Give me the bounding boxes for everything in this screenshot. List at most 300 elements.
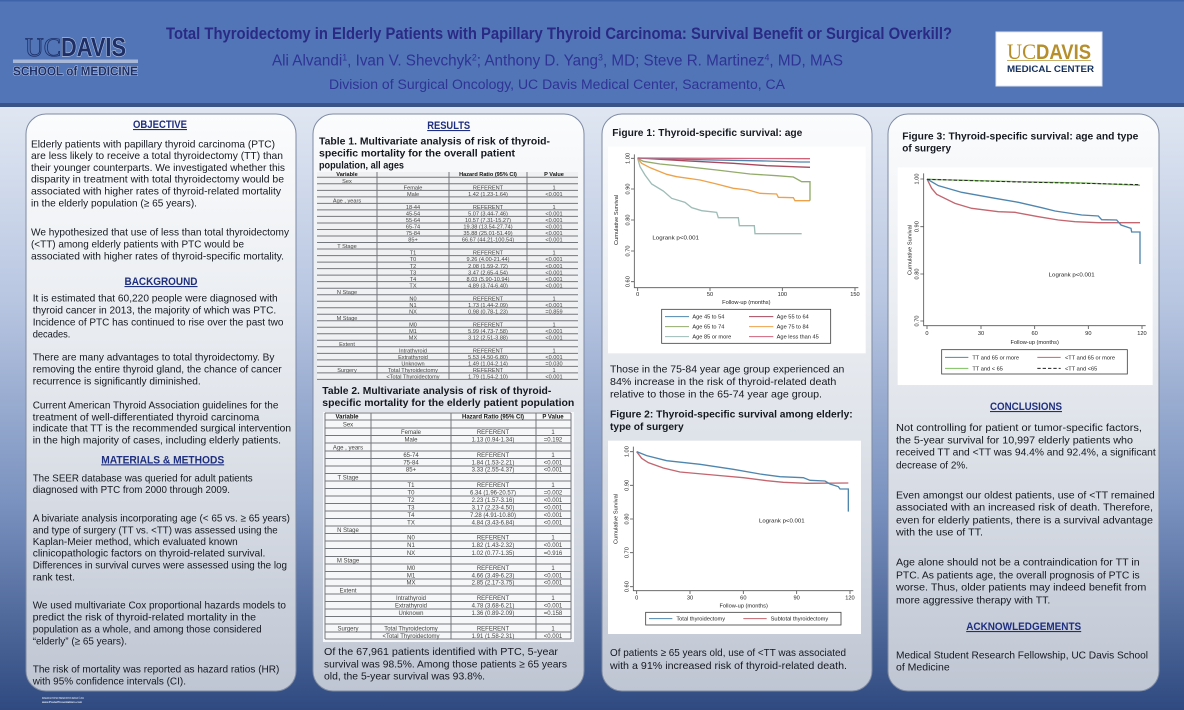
text: materials and methods: “elderly” (≥ 65 years). (33, 636, 127, 647)
table 1: Extent (339, 342, 355, 348)
panel: objective, background, methods (26, 114, 296, 691)
table 1: 4.89 (3.74-6.40) (468, 283, 508, 289)
authors: 4 (765, 52, 769, 62)
table 2: TX (407, 520, 415, 526)
table 1: 5.07 (3.44-7.46) (468, 212, 508, 218)
table 1: N1 (409, 303, 417, 309)
heading: acknowledgements: ACKNOWLEDGEMENTS (966, 621, 1081, 633)
authors: , MD; Steve R. Martinez (603, 52, 765, 70)
text: materials and methods: Kaplan-Meier method, which evaluated known (33, 537, 238, 548)
text: figure 2 finding (609, 648, 847, 672)
axis labels: 0.60 (625, 276, 631, 287)
table 2: T4 (407, 513, 415, 519)
text: background: Incidence of PTC has continued to rise over the past two (33, 317, 284, 328)
figure 2 heading: type of surgery (610, 422, 684, 433)
axis labels: 0.60 (624, 581, 630, 592)
legend (942, 350, 1127, 374)
table 2 caption: Table 2. Multivariate analysis of risk of thyroid- (322, 386, 552, 397)
table 2: M0 (407, 566, 416, 572)
table 1: <0.001 (545, 225, 563, 231)
table 1: 8.03 (5.90-10.94) (467, 277, 510, 283)
axis labels: 0.70 (915, 315, 921, 327)
table 2: M1 (407, 574, 416, 580)
table 1: 1 (552, 186, 556, 192)
text: conclusions (895, 423, 1156, 606)
table 2: N0 (407, 536, 415, 542)
axis labels: Cumulative Survival (613, 494, 619, 544)
table 2: MX (406, 580, 416, 586)
table 2: Extent (339, 588, 357, 594)
curve: TT and under 65 (927, 179, 1140, 185)
table 2: T0 (407, 490, 415, 496)
table 2: 1 (551, 626, 555, 632)
axis labels: 0 (925, 331, 929, 337)
table 1: 1.49 (1.04-2.14) (468, 362, 508, 368)
table 2: REFERENT (477, 453, 509, 459)
header banner (0, 0, 1184, 107)
curve: less than TT and under 65 (927, 179, 1140, 185)
text: background: recurrence is significantly diminished. (33, 377, 201, 388)
logo: UC Davis Medical Center: DAVIS (1036, 41, 1091, 64)
axis labels (614, 153, 860, 306)
table 1 (317, 172, 578, 381)
text: materials and methods: predict the risk of thyroid-related mortality in the (33, 612, 256, 623)
text: acknowledgements: of Medicine (896, 663, 950, 674)
authors: ; Anthony D. Yang (477, 52, 598, 70)
table 2: 2.23 (1.57-3.16) (472, 498, 514, 504)
table 1: 85+ (408, 238, 418, 244)
text: materials and methods: rank test. (33, 573, 75, 584)
table 1: <0.001 (545, 283, 563, 289)
table 2: 1.02 (0.77-1.35) (472, 551, 514, 557)
table 1: M Stage (337, 316, 357, 322)
text: materials and methods: diagnosed with PTC from 2000 through 2009. (33, 485, 230, 496)
legend: Age 85 or more (692, 335, 731, 341)
table 1: Male (407, 192, 419, 198)
table 1: <0.001 (545, 238, 563, 244)
axis labels: Logrank p<0.001 (1049, 273, 1095, 279)
table 2: N1 (407, 543, 415, 549)
axis labels: 0.90 (625, 183, 631, 195)
figure 3 heading: of surgery (902, 144, 951, 155)
text: background: treatment of well-differentiated thyroid carcinoma (33, 412, 260, 423)
table 2: 75-84 (403, 460, 419, 466)
axis labels: 1.00 (625, 153, 631, 164)
chart: figure 1 survival by age (608, 147, 866, 353)
table 1: <0.001 (545, 212, 563, 218)
table 2: T1 (407, 483, 415, 489)
text: conclusions: decrease of 2%. (896, 460, 968, 471)
table 2: M Stage (337, 558, 360, 564)
axis labels: 100 (778, 292, 787, 298)
text: objective: Elderly patients with papillary thyroid carcinoma (PTC) (31, 140, 275, 151)
axis labels: Follow-up (months) (1010, 340, 1059, 346)
table 2: Variable (335, 414, 359, 420)
text: conclusions: Age alone should not be a contraindication for TT in (896, 558, 1140, 569)
curve: age 55 to 64 (638, 158, 810, 167)
table 2: REFERENT (477, 626, 509, 632)
figure 1 heading: Figure 1: Thyroid-specific survival: age (612, 128, 803, 139)
heading: results: RESULTS (427, 120, 470, 132)
table 2: 1 (551, 536, 555, 542)
curve: age 45 to 54 (638, 158, 810, 162)
text: figure 2 finding: Of patients ≥ 65 years old, use of <TT was associated (610, 648, 846, 659)
table 2: =0.002 (544, 490, 563, 496)
table 1: 75-84 (406, 231, 420, 237)
text: background: There are many advantages to total thyroidectomy. By (33, 353, 275, 364)
table 2 caption (322, 386, 574, 409)
axis labels: 30 (978, 331, 984, 337)
table 2: T2 (407, 498, 415, 504)
heading: conclusions: CONCLUSIONS (990, 401, 1062, 413)
table 1: 10.57 (7.31-15.27) (465, 218, 511, 224)
text: figure 1 finding: 84% increase in the risk of thyroid-related death (610, 377, 837, 388)
text: materials and methods: A bivariate analysis incorporating age (< 65 vs. ≥ 65 years) (33, 514, 290, 525)
axis labels: 30 (687, 596, 693, 602)
axis labels: 0.80 (624, 513, 630, 525)
table 2: 1.91 (1.58-2.31) (472, 634, 514, 640)
table 1: 5.53 (4.50-6.80) (468, 355, 508, 361)
table 2: <Total Thyroidectomy (382, 634, 440, 640)
table 1: <0.001 (545, 231, 563, 237)
text: acknowledgements: Medical Student Research Fellowship, UC Davis School (896, 650, 1148, 661)
table 2: <0.001 (544, 543, 563, 549)
table 1: Age , years (333, 199, 361, 205)
table 1: TX (409, 283, 417, 289)
legend: Total thyroidectomy (676, 617, 725, 623)
heading: materials and methods: MATERIALS & METHODS (101, 454, 224, 466)
table 2: <0.001 (544, 520, 563, 526)
table 2: T3 (407, 506, 415, 512)
table 1: T0 (410, 257, 416, 263)
table 2: Age , years (333, 446, 363, 452)
table 1: 35.88 (25.01-51.49) (463, 231, 513, 237)
logo: UC Davis School of Medicine: DAVIS (61, 32, 126, 62)
text: figure 1 finding: Those in the 75-84 year age group experienced an (610, 365, 845, 376)
table 2: <0.001 (544, 574, 563, 580)
legend: Subtotal thyroidectomy (771, 617, 828, 623)
table 2: REFERENT (477, 536, 509, 542)
table 2: P Value (542, 414, 564, 420)
axis labels: 0.70 (625, 245, 631, 257)
axis labels (613, 446, 855, 609)
table 2: Intrathyroid (396, 596, 426, 602)
axis labels: 0.90 (915, 221, 921, 232)
text: background: Current American Thyroid Association guidelines for the (33, 400, 279, 411)
text: results summary (324, 647, 567, 682)
table 2: 3.17 (2.23-4.50) (472, 506, 514, 512)
table 1: N Stage (337, 290, 357, 296)
axis labels: Logrank p<0.001 (652, 235, 699, 241)
table 1: 66.67 (44.21-100.54) (462, 238, 514, 244)
text: figure 1 finding (610, 365, 845, 400)
text: background: removing the entire thyroid gland, the chance of cancer (33, 365, 282, 376)
axis labels: 1.00 (915, 173, 921, 185)
heading: background: BACKGROUND (124, 276, 198, 288)
legend (662, 309, 831, 343)
table 2: 3.33 (2.55-4.37) (472, 468, 514, 474)
curve: age less than 45 (638, 156, 810, 161)
figure 2 heading (610, 410, 853, 433)
table 2: 1.82 (1.43-2.32) (472, 543, 514, 549)
table 1: 1.42 (1.23-1.64) (468, 192, 508, 198)
table 2: 2.85 (2.17-3.75) (472, 580, 514, 586)
footer credit: RESEARCH POSTER PRESENTATION DESIGN © 2012 (42, 696, 84, 700)
text: materials and methods: clinicopathologic factors on thyroid-related survival. (33, 549, 265, 560)
table 1: Total Thyroidectomy (388, 368, 438, 374)
table 1: 0.98 (0.78-1.23) (468, 309, 508, 315)
text: conclusions: even for elderly patients, there is a survival advantage (896, 515, 1153, 526)
table 2: NX (407, 551, 415, 557)
table 1: 65-74 (406, 225, 420, 231)
table 1: REFERENT (473, 296, 504, 302)
table 1: <0.001 (545, 375, 563, 381)
text: conclusions: received TT and <TT was 94.4% and 92.4%, a significant (896, 448, 1156, 459)
axis labels: 50 (707, 292, 713, 298)
table 1: 5.99 (4.73-7.58) (468, 329, 508, 335)
table 1 caption: specific mortality for the overall patient (319, 148, 516, 159)
legend: <TT and <65 (1065, 366, 1097, 372)
table 1: <Total Thyroidectomy (386, 375, 440, 381)
logo: UC Davis School of Medicine: SCHOOL of MEDICINE (13, 64, 138, 78)
table 1: M1 (409, 329, 417, 335)
text: conclusions: Even amongst our oldest patients, use of <TT remained (896, 490, 1155, 501)
table 1: 1 (552, 348, 556, 354)
curve: subtotal thyroidectomy (637, 452, 848, 483)
table 2: 65-74 (403, 453, 419, 459)
table 2: 1 (551, 453, 555, 459)
table 2: <0.001 (544, 498, 563, 504)
text: materials and methods (32, 473, 290, 687)
axis labels: 90 (794, 596, 800, 602)
text: objective: (<TT) among elderly patients with PTC would be (31, 239, 244, 250)
axis labels: Follow-up (months) (719, 603, 768, 609)
text: acknowledgements (896, 650, 1148, 674)
curve: total thyroidectomy (637, 452, 848, 512)
table 1: T4 (410, 277, 416, 283)
text: materials and methods: The risk of mortality was reported as hazard ratios (HR) (33, 665, 279, 676)
table 1: <0.001 (545, 303, 563, 309)
table 1: =0.859 (545, 309, 563, 315)
text: materials and methods: and type of surgery (TT vs. <TT) was assessed using the (33, 525, 278, 536)
table 1: 45-54 (406, 212, 420, 218)
legend (646, 612, 841, 625)
text: materials and methods: The SEER database was queried for adult patients (33, 473, 253, 484)
legend: Age 45 to 54 (692, 315, 724, 321)
table 1: Variable (336, 172, 358, 178)
table 2: Hazard Ratio (95% CI) (462, 414, 524, 420)
table 1: M0 (409, 322, 417, 328)
table 1: Female (404, 186, 422, 192)
legend: Age 75 to 84 (777, 325, 809, 331)
text: results summary: survival was 98.5%. Among those patients ≥ 65 years (324, 659, 567, 670)
table 1: REFERENT (473, 322, 504, 328)
table 1: <0.001 (545, 270, 563, 276)
table 2: T Stage (338, 476, 359, 482)
legend: Age 65 to 74 (692, 325, 724, 331)
axis labels: 0 (636, 292, 639, 298)
table 1: =0.030 (545, 362, 563, 368)
table 1: N0 (409, 296, 417, 302)
axis labels: Cumulative Survival (614, 195, 620, 245)
axis labels: 90 (1085, 331, 1091, 337)
table 1: 9.26 (4.00-21.44) (467, 257, 510, 263)
table 2: 4.66 (3.49-6.23) (472, 574, 514, 580)
legend: TT and 65 or more (972, 355, 1019, 361)
footer credit: www.PosterPresentations.com (41, 700, 82, 704)
text: objective: We hypothesized that use of less than total thyroidectomy (31, 228, 290, 239)
table 1: 1 (552, 322, 556, 328)
text: conclusions: associated with an increased risk of death. Therefore, (896, 503, 1153, 514)
legend: TT and < 65 (972, 366, 1003, 372)
table 2: 1 (551, 596, 555, 602)
axis labels (908, 173, 1147, 346)
table 2: REFERENT (477, 566, 509, 572)
figure 2 heading: Figure 2: Thyroid-specific survival among elderly: (610, 410, 853, 421)
axis labels: Follow-up (months) (722, 300, 771, 306)
table 1: <0.001 (545, 355, 563, 361)
table 2: N Stage (337, 528, 359, 534)
table 1: Sex (342, 179, 352, 185)
curve: age 75 to 84 (638, 158, 810, 201)
table 1: 1.73 (1.44-2.09) (468, 303, 508, 309)
curve: age 85 or more (638, 158, 802, 234)
logo: UC Davis Medical Center: MEDICAL CENTER (1007, 64, 1095, 74)
table 2: 85+ (406, 468, 417, 474)
table 2: REFERENT (477, 596, 509, 602)
table 1: <0.001 (545, 264, 563, 270)
table 2: 1.13 (0.94-1.34) (472, 438, 514, 444)
table 2: 1 (551, 483, 555, 489)
table 2: <0.001 (544, 468, 563, 474)
table 1: <0.001 (545, 257, 563, 263)
table 1: <0.001 (545, 277, 563, 283)
text: background: thyroid cancer in 2013, the majority of which was PTC. (33, 305, 276, 316)
chart: figure 3 survival by age and surgery (898, 167, 1153, 385)
axis labels: 0.80 (915, 268, 921, 280)
table 1: 18-44 (406, 205, 420, 211)
text: background: decades. (33, 329, 70, 340)
text: objective: their younger counterparts. We investigated whether this (31, 163, 285, 174)
text: objective: associated with higher rates of thyroid-related mortality (31, 186, 282, 197)
table 2: =0.916 (544, 551, 563, 557)
axis labels: 150 (850, 292, 860, 298)
text: objective: disparity in treatment with total thyroidectomy would be (31, 175, 284, 186)
figure 3 heading (902, 131, 1139, 155)
table 1: 1 (552, 251, 556, 257)
axis labels: 1.00 (624, 446, 630, 457)
table 1: REFERENT (473, 368, 504, 374)
table 2: REFERENT (477, 430, 509, 436)
table 1: T2 (410, 264, 416, 270)
table 1: Extrathyroid (398, 355, 428, 361)
text: background (33, 294, 291, 447)
text: objective (31, 140, 290, 262)
table 1: MX (409, 336, 417, 342)
axis labels: 0.90 (624, 480, 630, 491)
table 2: 1.36 (0.89-2.09) (472, 611, 514, 617)
affiliation: Division of Surgical Oncology, UC Davis Medical Center, Sacramento, CA (329, 77, 785, 92)
table 2 (323, 412, 574, 642)
table 1: T3 (410, 270, 416, 276)
table 1: T1 (410, 251, 416, 257)
text: background: It is estimated that 60,220 people were diagnosed with (33, 294, 278, 305)
table 2: Extrathyroid (395, 604, 427, 610)
text: materials and methods: population as a whole, and among those considered (33, 624, 262, 635)
logo: UC Davis School of Medicine (13, 32, 138, 78)
table 2: 4.84 (3.43-6.84) (472, 520, 514, 526)
text: results summary: Of the 67,961 patients identified with PTC, 5-year (324, 647, 559, 658)
table 2: =0.192 (544, 438, 563, 444)
table 2: 1 (551, 566, 555, 572)
axis labels: Cumulative Survival (908, 225, 914, 275)
axis labels: 0.70 (624, 547, 630, 558)
text: conclusions: PTC. As patients age, the overall prognosis of PTC is (896, 570, 1140, 581)
text: figure 1 finding: relative to those in the 65-74 year age group. (610, 389, 822, 400)
logo: UC Davis Medical Center: UC (1007, 39, 1036, 64)
authors: 2 (472, 52, 477, 62)
table 2: Total Thyroidectomy (384, 626, 438, 632)
table 2: =0.158 (544, 611, 563, 617)
table 1: T Stage (337, 244, 357, 250)
authors: 3 (598, 52, 603, 62)
table 1: REFERENT (473, 205, 504, 211)
table 2: Sex (343, 422, 353, 428)
table 1: <0.001 (545, 218, 563, 224)
text: results summary: old, the 5-year survival was 93.8%. (324, 671, 485, 682)
table 2: 4.78 (3.68-6.21) (472, 604, 514, 610)
table 2: 1 (551, 430, 555, 436)
authors: , MD, MAS (769, 52, 843, 70)
text: objective: are less likely to receive a total thyroidectomy (TT) than (31, 151, 283, 162)
table 1: <0.001 (545, 329, 563, 335)
footer credit (41, 696, 84, 704)
table 2: 1.84 (1.53-2.21) (472, 460, 514, 466)
text: conclusions: the 5-year survival for 10,997 elderly patients who (896, 435, 1133, 446)
table 2: REFERENT (477, 483, 509, 489)
text: objective: in the elderly population (≥ 65 years). (31, 198, 197, 209)
text: background: in the high majority of cases, including elderly patients. (33, 436, 281, 447)
text: conclusions: more aggressive therapy with TT. (896, 595, 1050, 606)
table 1 caption: Table 1. Multivariate analysis of risk of thyroid- (319, 136, 551, 147)
table 1: Unknown (401, 362, 425, 368)
table 2: <0.001 (544, 513, 563, 519)
chart: figure 2 survival by surgery type (608, 441, 861, 634)
table 1: <0.001 (545, 336, 563, 342)
axis labels: 60 (1032, 331, 1038, 337)
table 1: REFERENT (473, 348, 504, 354)
table 1: 3.12 (2.51-3.88) (468, 336, 508, 342)
table 2: Surgery (337, 626, 359, 632)
table 1: REFERENT (473, 186, 504, 192)
text: materials and methods: We used multivariate Cox proportional hazards models to (33, 601, 286, 612)
table 1: <0.001 (545, 192, 563, 198)
table 1: REFERENT (473, 251, 504, 257)
table 1: P Value (544, 172, 564, 178)
table 2: 6.34 (1.96-20.57) (470, 490, 516, 496)
logo: UC Davis Medical Center (996, 32, 1102, 86)
table 2: <0.001 (544, 506, 563, 512)
text: materials and methods: Differences in survival curves were assessed using the log (33, 561, 287, 572)
axis labels: 120 (845, 596, 855, 602)
table 2: <0.001 (544, 604, 563, 610)
table 1: Surgery (337, 368, 357, 374)
panel: results (313, 114, 584, 691)
table 2: Female (401, 430, 422, 436)
authors: , Ivan V. Shevchyk (347, 52, 472, 70)
text: figure 2 finding: with a 91% increased risk of thyroid-related death. (609, 661, 847, 672)
table 2 caption: specific mortality for the elderly patient population (322, 398, 574, 409)
